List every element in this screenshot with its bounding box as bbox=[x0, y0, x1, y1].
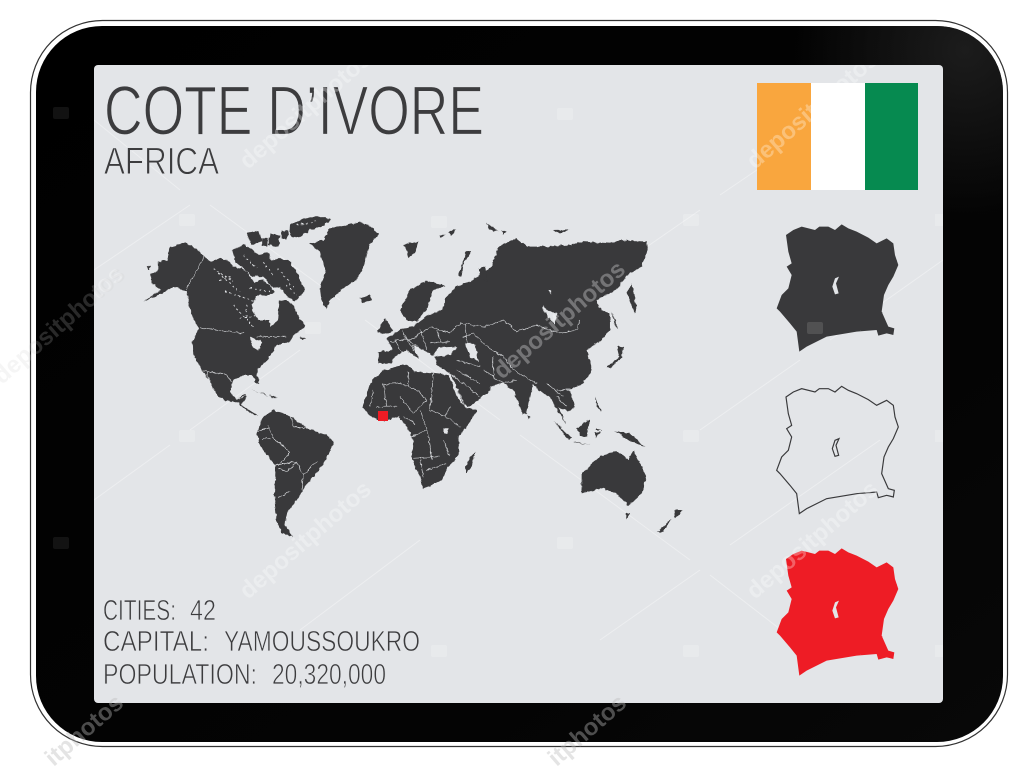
subtitle: AFRICA bbox=[104, 141, 220, 183]
watermarks on screen: depositphotos bbox=[488, 256, 631, 385]
africa, eurasia, oceania bbox=[363, 223, 683, 533]
world map bbox=[143, 216, 683, 537]
facts text: CAPITAL: bbox=[103, 626, 209, 658]
screen panel bbox=[94, 65, 943, 703]
watermarks on screen bbox=[274, 87, 878, 570]
watermarks on screen: depositphotos bbox=[234, 476, 377, 605]
camera watermark icons bbox=[53, 107, 943, 657]
watermark lines bbox=[94, 100, 943, 660]
facts text: POPULATION: bbox=[103, 659, 257, 691]
watermarks on screen: depositphotos bbox=[234, 46, 377, 175]
country silhouette: dark bbox=[777, 224, 898, 352]
watermarks on screen: depositphotos bbox=[741, 476, 884, 605]
title: COTE D’IVORE bbox=[104, 72, 484, 150]
watermarks on screen: depositphotos bbox=[741, 46, 884, 175]
flag bbox=[757, 83, 918, 190]
facts text: 42 bbox=[190, 595, 216, 627]
country silhouette: red bbox=[777, 548, 898, 676]
watermarks outside screen bbox=[0, 261, 632, 767]
facts text: YAMOUSSOUKRO bbox=[224, 626, 420, 658]
americas bbox=[143, 216, 378, 537]
facts text: 20,320,000 bbox=[272, 659, 386, 691]
highlighted country marker bbox=[378, 411, 388, 421]
facts text bbox=[103, 595, 420, 691]
country outline bbox=[777, 386, 898, 514]
landmasses bbox=[143, 216, 683, 537]
facts text: CITIES: bbox=[103, 595, 176, 627]
